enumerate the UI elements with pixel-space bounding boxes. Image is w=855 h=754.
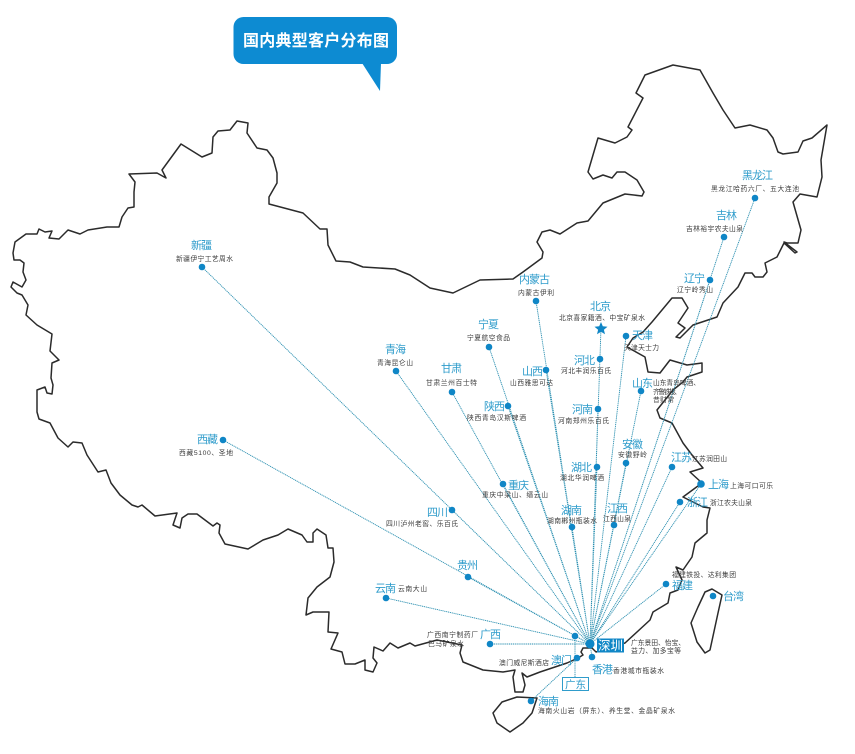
province labels and client names: 益力、加多宝等 [631,646,681,655]
province labels and client names: 江西 [607,502,628,515]
province labels and client names: 云南 [375,582,396,595]
province labels and client names: 浙江 [687,496,708,509]
province labels and client names: 宁夏航空食品 [467,333,510,342]
province labels and client names: 贵州 [457,559,478,572]
province labels and client names: 天津 [632,329,653,342]
province labels and client names: 新疆 [191,238,212,252]
province labels and client names: 湖北华润啤酒 [560,473,604,482]
title callout [234,17,397,91]
province labels and client names: 黑龙江 [742,169,773,182]
province labels and client names: 湖南 [561,504,582,517]
province labels and client names: 内蒙古伊利 [518,288,554,297]
province labels and client names: 湖南郴州瓶装水 [547,516,597,525]
province labels and client names: 甘肃 [441,362,462,375]
province labels and client names: 山东 [632,377,653,390]
route lines to Shenzhen [202,198,755,701]
province labels and client names: 北京 [590,299,611,313]
province labels and client names: 山西雅思可达 [510,378,553,387]
province labels and client names: 澳门威尼斯酒店 [499,658,549,667]
province labels and client names: 昔财常 [653,395,674,404]
province labels and client names: 台湾 [723,589,744,603]
island: Hainan [493,697,537,732]
province labels and client names: 海南 [538,694,559,708]
province labels and client names: 甘肃兰州百士特 [426,378,477,387]
province labels and client names: 巴马矿泉水 [428,639,464,648]
province labels and client names: 天津天士力 [624,343,659,352]
province labels and client names: 新疆伊宁工艺周水 [176,254,233,263]
province labels and client names: 河北 [574,354,595,367]
province labels and client names: 西藏 [197,433,218,446]
province labels and client names: 北京喜家籍酒、中宝矿泉水 [559,313,645,322]
province labels and client names: 齐鲁铁投、 [653,387,681,396]
province labels and client names: 山东青岛啤酒、 [653,378,700,387]
province labels and client names [176,169,799,715]
province labels and client names: 宁夏 [478,317,499,331]
province labels and client names: 内蒙古 [519,272,550,286]
province labels and client names: 上海可口可乐 [730,481,773,490]
province labels and client names: 吉林 [716,208,737,222]
province labels and client names: 澳门 [551,653,572,667]
province labels and client names: 湖北 [571,461,592,474]
province labels and client names: 江苏 [671,451,692,464]
province labels and client names: 河南郑州乐百氏 [558,416,609,425]
province labels and client names: 辽宁岭秀山 [677,285,713,294]
province labels and client names: 上海 [708,477,729,491]
province labels and client names: 黑龙江哈药六厂、五大连池 [711,184,799,193]
province labels and client names: 山西 [522,365,543,378]
location dots [199,195,758,704]
province labels and client names: 广西南宁制药厂 [427,630,478,639]
Guangdong label box: 广东 [565,678,586,691]
province labels and client names: 西藏5100、圣地 [179,448,233,457]
province labels and client names: 陕西青岛汉斯啤酒 [467,413,526,422]
province labels and client names: 香港 [592,663,613,676]
province labels and client names: 四川泸州老窖、乐百氏 [386,519,458,528]
icon: Beijing star [594,322,608,334]
province labels and client names: 云南大山 [398,584,427,593]
province labels and client names: 青海昆仑山 [377,358,413,367]
province labels and client names: 香港城市瓶装水 [613,666,664,675]
province labels and client names: 广西 [480,628,501,641]
province labels and client names: 江苏润田山 [692,454,727,463]
province labels and client names: 福建铁投、达利集团 [672,570,736,579]
province labels and client names: 河北丰润乐百氏 [561,366,611,375]
province labels and client names: 海南火山岩（屏东）、养生堂、金晶矿泉水 [538,706,675,715]
province labels and client names: 安徽 [622,437,643,451]
province labels and client names: 吉林裕宇农夫山泉 [686,224,743,233]
province labels and client names: 重庆 [508,478,529,492]
province labels and client names: 青海 [385,342,406,356]
title callout: 国内典型客户分布图 [243,31,389,50]
province labels and client names: 河南 [572,403,593,416]
province labels and client names: 福建 [672,578,693,592]
province labels and client names: 安徽野岭 [618,450,647,459]
province labels and client names: 广东景田、怡宝、 [631,638,685,647]
province labels and client names: 陕西 [484,399,505,413]
island: Taiwan [691,589,722,653]
province labels and client names: 重庆中梁山、缙云山 [482,490,548,499]
province labels and client names: 江西山泉 [603,514,631,523]
province labels and client names: 四川 [427,507,448,519]
Shenzhen label box: 深圳 [598,639,623,653]
province labels and client names: 浙江农夫山泉 [710,498,752,507]
province labels and client names: 辽宁 [684,271,705,285]
